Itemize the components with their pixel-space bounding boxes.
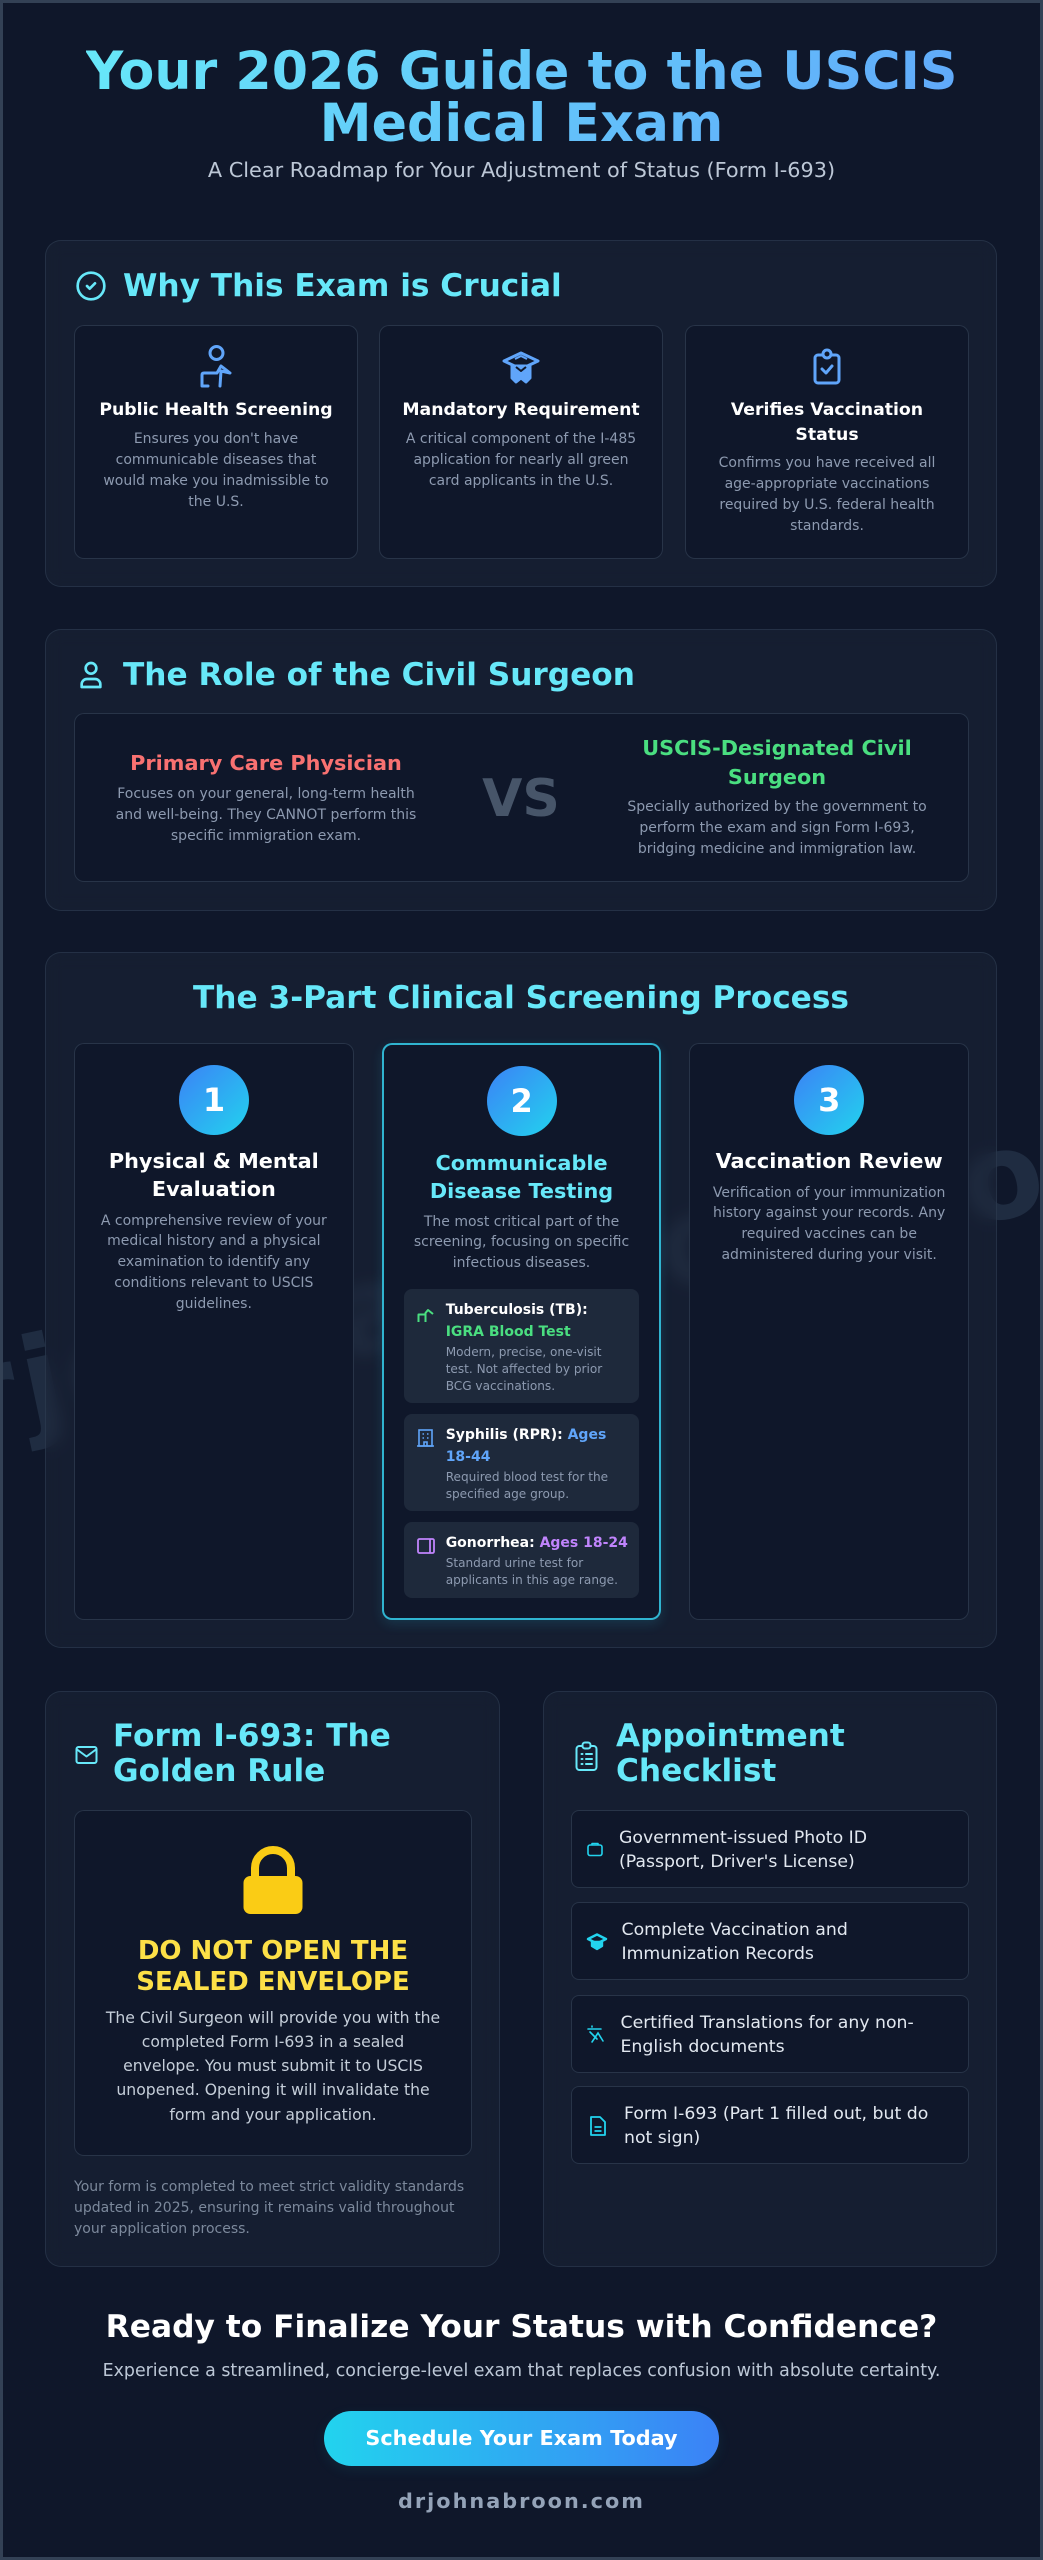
card text: required by U.S. federal health: [719, 497, 935, 513]
step 3 card: [689, 1043, 969, 1620]
test text: [446, 1426, 608, 1501]
icon: briefcase: [587, 1842, 603, 1856]
heading: [616, 1718, 845, 1788]
footnote: your application process.: [74, 2221, 250, 2237]
test text: Tuberculosis (TB):: [446, 1302, 588, 1318]
test text: [446, 1535, 628, 1587]
column text: bridging medicine and immigration law.: [638, 841, 916, 857]
column title: Surgeon: [728, 765, 826, 789]
primary care physician column: [116, 751, 416, 844]
test text: Standard urine test for: [446, 1556, 583, 1570]
warning text: The Civil Surgeon will provide you with the: [106, 2008, 440, 2026]
icon: building: [417, 1429, 434, 1447]
step title: [430, 1151, 613, 1203]
panel: role of the civil surgeon: [45, 629, 997, 911]
step 1 card: [74, 1043, 354, 1620]
cta heading: Ready to Finalize Your Status with Confidence?: [106, 2309, 937, 2345]
icon: circle check: [76, 271, 106, 301]
title: Medical Exam: [320, 94, 723, 154]
number badge: 3: [818, 1081, 840, 1119]
title: [85, 47, 958, 150]
heading: Form I-693: The: [113, 1718, 391, 1754]
icon: graduation cap: [586, 1933, 608, 1950]
icon: user: [80, 662, 102, 688]
footnote: [74, 2179, 464, 2237]
test text: applicants in this age range.: [446, 1573, 618, 1587]
website: drjohnabroon.com: [398, 2489, 645, 2513]
column title: [642, 736, 912, 789]
icon: envelope: [76, 1746, 98, 1764]
column text: [116, 786, 416, 844]
card title: Status: [795, 425, 859, 445]
cta text: Experience a streamlined, concierge-level exam that replaces confusion with absolute certainty.: [103, 2361, 940, 2381]
step text: [713, 1184, 945, 1263]
number badge: [794, 1065, 864, 1135]
step text: history against your records. Any: [713, 1205, 945, 1221]
test: syphilis: [404, 1414, 639, 1511]
item text: [619, 1828, 867, 1872]
icon: graduation cap: [502, 352, 540, 384]
number badge: 1: [203, 1081, 225, 1119]
item text: Form I-693 (Part 1 filled out, but do: [624, 2104, 928, 2124]
step title: Physical & Mental: [109, 1149, 319, 1173]
item text: Certified Translations for any non-: [620, 2012, 914, 2032]
icon: clipboard list: [576, 1742, 598, 1771]
footnote: Your form is completed to meet strict validity standards: [74, 2179, 464, 2195]
number badge: [487, 1066, 557, 1136]
item text: not sign): [624, 2128, 700, 2148]
column text: Specially authorized by the government to: [627, 799, 927, 815]
step text: infectious diseases.: [453, 1255, 590, 1271]
item text: (Passport, Driver's License): [619, 1852, 855, 1872]
civil surgeon column: [627, 736, 927, 857]
heading: The 3-Part Clinical Screening Process: [193, 980, 849, 1016]
test text: Syphilis (RPR): Ages: [446, 1426, 606, 1442]
column title: Primary Care Physician: [130, 751, 402, 775]
warning heading: SEALED ENVELOPE: [136, 1966, 410, 1996]
icon: document: [590, 2116, 606, 2136]
test text: test. Not affected by prior: [446, 1362, 602, 1376]
step text: guidelines.: [176, 1296, 252, 1312]
cta button: [324, 2411, 719, 2466]
step text: The most critical part of the: [424, 1214, 619, 1230]
item text: Government-issued Photo ID: [619, 1828, 867, 1848]
heading: Checklist: [616, 1752, 776, 1788]
test text: BCG vaccinations.: [446, 1379, 555, 1393]
warning text: completed Form I-693 in a sealed: [142, 2032, 404, 2051]
item text: Immunization Records: [622, 1944, 814, 1964]
heading: Why This Exam is Crucial: [123, 268, 562, 304]
title: Your 2026 Guide to the USCIS: [85, 42, 958, 102]
subtitle: A Clear Roadmap for Your Adjustment of Status (Form I-693): [208, 158, 835, 182]
item: form i-693: [571, 2086, 969, 2164]
step text: A comprehensive review of your: [101, 1212, 327, 1228]
icon: person: [200, 345, 232, 388]
card text: the U.S.: [188, 494, 244, 510]
card text: Ensures you don't have: [134, 430, 298, 446]
card text: [719, 455, 935, 534]
item text: [620, 2012, 914, 2057]
footnote: updated in 2025, ensuring it remains valid throughout: [74, 2200, 454, 2216]
icon: tb: [418, 1309, 434, 1322]
card text: card applicants in the U.S.: [429, 472, 613, 488]
test: tuberculosis: [404, 1289, 639, 1403]
step title: Disease Testing: [430, 1179, 613, 1203]
card text: age-appropriate vaccinations: [725, 476, 929, 492]
test text: Required blood test for the: [446, 1470, 608, 1484]
column text: specific immigration exam.: [171, 828, 361, 844]
panel: appointment checklist: [543, 1691, 997, 2267]
column text: Focuses on your general, long-term health: [117, 786, 415, 802]
card: verifies vaccination status: [685, 325, 969, 559]
step title: Evaluation: [152, 1177, 276, 1201]
item text: [624, 2102, 928, 2150]
item: photo id: [571, 1810, 969, 1888]
card text: A critical component of the I-485: [406, 430, 636, 446]
card title: [731, 400, 923, 445]
card text: standards.: [790, 518, 864, 534]
step text: [101, 1212, 327, 1312]
test text: Modern, precise, one-visit: [446, 1344, 601, 1358]
card text: communicable diseases that: [116, 452, 316, 468]
panel: why this exam is crucial: [45, 240, 997, 587]
step text: required vaccines can be: [741, 1226, 917, 1242]
card: mandatory requirement: [379, 325, 663, 559]
step text: administered during your visit.: [721, 1247, 937, 1263]
card text: [406, 430, 636, 488]
step text: conditions relevant to USCIS: [114, 1275, 313, 1291]
step text: medical history and a physical: [107, 1233, 321, 1249]
column text: and well-being. They CANNOT perform this: [116, 806, 416, 822]
heading: The Role of the Civil Surgeon: [123, 657, 635, 693]
step 2 card (highlighted): [382, 1043, 661, 1620]
card title: Public Health Screening: [99, 400, 333, 420]
item: vaccination records: [571, 1902, 969, 1980]
card text: [103, 430, 329, 510]
card text: would make you inadmissible to: [103, 472, 329, 488]
test text: specified age group.: [446, 1487, 569, 1501]
panel: form i-693 golden rule: [45, 1691, 500, 2267]
item text: Complete Vaccination and: [622, 1920, 848, 1940]
icon: padlock: [244, 1846, 302, 1914]
step text: screening, focusing on specific: [414, 1234, 629, 1250]
panel: 3-part clinical screening: [45, 952, 997, 1648]
column text: perform the exam and sign Form I-693,: [639, 820, 915, 836]
icon: clipboard check: [814, 348, 840, 384]
test text: IGRA Blood Test: [446, 1324, 571, 1340]
column title: USCIS-Designated Civil: [642, 736, 912, 760]
step title: Communicable: [435, 1151, 608, 1175]
icon: translate: [587, 2025, 604, 2043]
test text: 18-44: [446, 1448, 490, 1464]
warning text: envelope. You must submit it to USCIS: [123, 2056, 423, 2075]
column text: [627, 799, 927, 857]
card: public health screening: [74, 325, 358, 559]
step text: [414, 1214, 629, 1271]
item text: English documents: [620, 2037, 785, 2057]
card title: Mandatory Requirement: [402, 400, 640, 420]
warning text: unopened. Opening it will invalidate the: [116, 2080, 430, 2099]
item text: [622, 1920, 848, 1964]
warning heading: [136, 1936, 410, 1996]
test text: Gonorrhea: Ages 18-24: [446, 1535, 628, 1551]
heading: Golden Rule: [113, 1752, 325, 1788]
step title: Vaccination Review: [716, 1149, 943, 1173]
comparison card: [74, 713, 969, 882]
step text: examination to identify any: [117, 1254, 310, 1270]
warning heading: DO NOT OPEN THE: [138, 1936, 408, 1966]
number badge: 2: [511, 1082, 533, 1120]
number badge: [179, 1065, 249, 1135]
warning text: form and your application.: [169, 2105, 377, 2124]
versus label: VS: [482, 769, 560, 829]
step title: [109, 1149, 319, 1201]
cta button: Schedule Your Exam Today: [365, 2426, 678, 2450]
sealed envelope card: [74, 1810, 472, 2156]
card text: application for nearly all green: [413, 452, 629, 468]
heading: [113, 1718, 391, 1788]
step text: Verification of your immunization: [713, 1184, 945, 1200]
item: certified translations: [571, 1995, 969, 2073]
icon: container: [417, 1538, 435, 1554]
warning text: [106, 2008, 440, 2124]
card text: Confirms you have received all: [719, 455, 935, 471]
card title: Verifies Vaccination: [731, 400, 923, 420]
test: gonorrhea: [404, 1522, 639, 1598]
heading: Appointment: [616, 1718, 845, 1754]
test text: [446, 1302, 602, 1393]
